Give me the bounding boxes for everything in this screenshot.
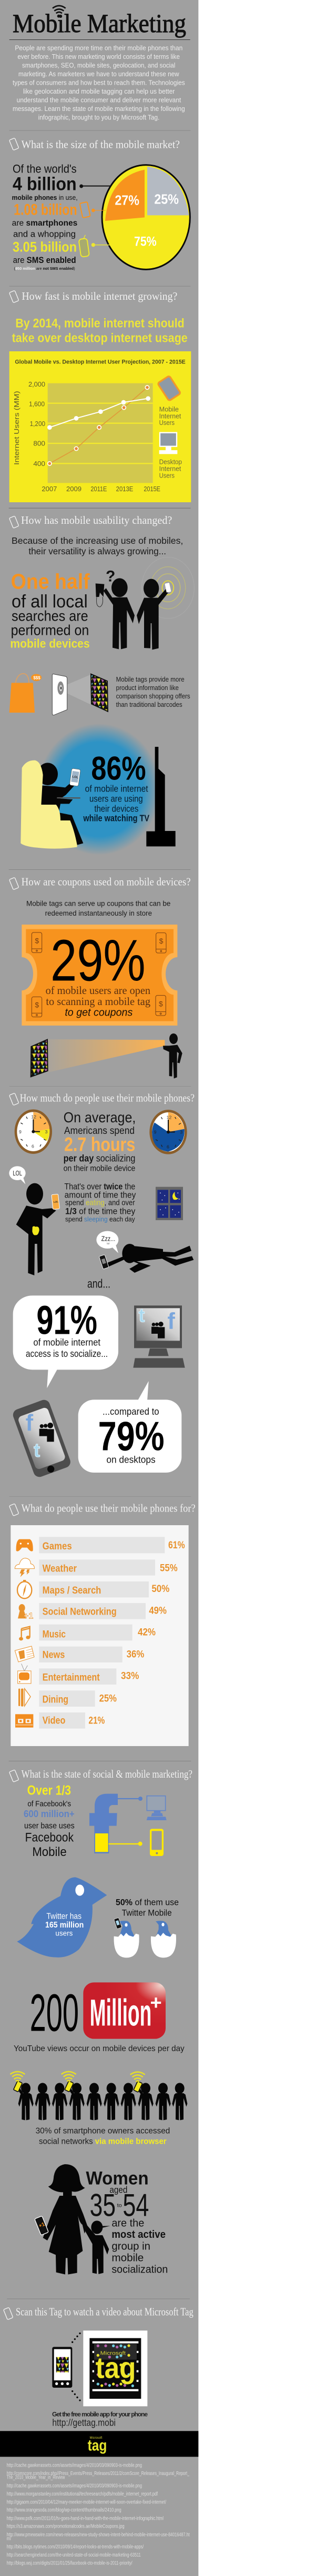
- source references: https://s3.amazonaws.com/promotionalcodes.ae/MobileCoupons.jpg: [7, 2524, 125, 2530]
- stat: 2.7 hours: 2.7 hours: [64, 1133, 135, 1155]
- panel: coupon ticket: to get coupons: [65, 1007, 133, 1019]
- stat text: phones in use: mobile phones in use,: [12, 194, 78, 201]
- source references: http://cache.gawkerassets.com/assets/images/4/2010/03/090903-is-mobile.png: [7, 2463, 142, 2469]
- icon: phone showing tag: [52, 2332, 81, 2401]
- stat: 200 million YouTube badge: +: [150, 1992, 162, 2014]
- stat: 86% while watching TV: 86%: [91, 751, 146, 787]
- row: entertainment: 33%: [121, 1671, 139, 1682]
- stat: 200 million YouTube badge: 200: [30, 1984, 79, 2043]
- intro text: [12, 535, 183, 556]
- row: video: Video: [43, 1715, 65, 1726]
- source references: http://comscore.com/index.php//Press_Events/Press_Releases/2011/2/comScore_Releases_Inaugural_Report_: [7, 2471, 189, 2477]
- footer band with Microsoft Tag logo: tag: [88, 2437, 107, 2454]
- panel: coupon ticket: to scanning a mobile tag: [46, 996, 150, 1008]
- icon: smartphone with social logos: t: [34, 1439, 40, 1461]
- row: music: Music: [43, 1629, 66, 1640]
- axis labels: 1,600: [29, 400, 45, 408]
- panel: phone uses bar chart: [11, 1525, 189, 1746]
- heading: How fast is mobile internet growing?: [22, 291, 177, 302]
- section: size of the mobile market: [9, 138, 190, 271]
- stat: 2.7 hours: per day socializing: [64, 1152, 135, 1163]
- stat: half use Twitter Mobile: [116, 1897, 179, 1918]
- stat: 86% while watching TV: their devices: [94, 803, 139, 814]
- text block: Mobile tags provide more: [116, 676, 185, 683]
- stat: women aged 35 to 54: most active: [111, 2228, 166, 2240]
- axis labels: 2,000: [28, 381, 45, 388]
- stat: Facebook mobile: of Facebook's: [27, 1800, 71, 1808]
- source references: http://www.morganstanley.com/institutional/techresearch/pdfs/mobile_internet_report.pdf: [7, 2491, 158, 2497]
- stat: 29%: 29%: [50, 927, 146, 993]
- section: phone usage time: [9, 1092, 195, 1388]
- intro paragraph: like geolocation and mobile tagging can help us better: [23, 88, 175, 95]
- row: music: [19, 1625, 156, 1640]
- caption: YouTube views occur on mobile devices per day: [14, 2044, 185, 2053]
- stat text: phones in use: Of the world's: [13, 162, 77, 175]
- row: dining: [18, 1689, 117, 1707]
- illustration: sleeping person with Zzz bubble: [96, 1231, 193, 1273]
- intro paragraph: understand the mobile consumer and deliver more relevant: [17, 97, 181, 104]
- stat: women aged 35 to 54: are the: [111, 2217, 144, 2229]
- row: maps: Maps / Search: [43, 1585, 101, 1596]
- stat text: phones in use: 4 billion: [13, 174, 77, 195]
- stat: 86% while watching TV: of mobile internet: [85, 784, 148, 794]
- icon: smartphone with connector: [80, 202, 106, 218]
- stat text: phones in use: are smartphones: [12, 219, 77, 228]
- source references: http://blogs.wsj.com/digits/2011/01/25/facebook-cto-mobile-is-2011-priority/: [7, 2561, 133, 2567]
- stat: one half of local searches: mobile devices: [10, 637, 90, 651]
- row: games: [16, 1537, 185, 1553]
- icon: phone: [9, 138, 19, 150]
- intro paragraph: smartphones, SEO, mobile sites, geolocation, and social: [22, 62, 175, 69]
- row: weather: Weather: [43, 1563, 77, 1574]
- intro paragraph: ever before. This new marketing world consists of terms like: [17, 53, 180, 60]
- text block: than traditional barcodes: [116, 701, 182, 708]
- illustration: person on couch watching TV: [21, 724, 176, 855]
- stat: 200 million YouTube badge: Million: [90, 1992, 151, 2034]
- figures: two people with devices: [96, 567, 171, 650]
- speech bubble: 91%: 91%: [36, 1298, 97, 1343]
- icon: shopping bag: [9, 674, 42, 713]
- pie chart: [102, 165, 190, 269]
- icon: phone: [9, 1093, 19, 1106]
- stat: 86% while watching TV: users are using: [89, 793, 143, 804]
- axis labels: 2007: [42, 485, 57, 493]
- row: entertainment: [18, 1664, 139, 1685]
- illustration: sleeping person with Zzz bubble: lol: [107, 1242, 109, 1245]
- legend: desktop: Users: [159, 472, 175, 479]
- header: [9, 6, 190, 131]
- speech bubble: 79%: on desktops: [106, 1454, 156, 1465]
- stat: one half of local searches: searches are: [12, 608, 88, 624]
- icon: wifi signal: [53, 6, 66, 17]
- section: footer: [0, 2410, 198, 2567]
- stat: 200 million YouTube badge: [30, 1982, 166, 2043]
- pie chart: 27%: [115, 192, 139, 208]
- text block: product information like: [116, 684, 179, 692]
- desktop series: [47, 396, 150, 430]
- comparison text: eating and sleeping: amount of time they: [65, 1190, 136, 1200]
- stat: Facebook mobile: 600 million+: [24, 1809, 75, 1819]
- comparison text: eating and sleeping: spend sleeping each day: [65, 1215, 135, 1223]
- intro text: Mobile tags can serve up coupons that can be: [26, 899, 171, 907]
- row: games: Games: [43, 1541, 72, 1552]
- row: music: 42%: [138, 1627, 156, 1638]
- stat: women aged 35 to 54: Women: [86, 2168, 149, 2188]
- panel: line chart: [9, 351, 191, 502]
- axis labels: 2011E: [90, 485, 107, 493]
- panel: line chart: Global Mobile vs. Desktop Internet User Projection, 2007 - 2015E: [15, 359, 186, 365]
- heading: What is the size of the mobile market?: [22, 139, 180, 151]
- stat: half use Twitter Mobile: Twitter Mobile: [122, 1908, 172, 1918]
- speech bubble: 91%: [13, 1295, 118, 1388]
- row: news: 36%: [127, 1649, 144, 1660]
- stat: women aged 35 to 54: aged: [109, 2184, 127, 2195]
- source references: http://bits.blogs.nytimes.com/2010/09/14/report-looks-at-trends-with-mobile-apps/: [7, 2544, 144, 2550]
- Microsoft Tag code: tag: [96, 2352, 136, 2385]
- app download text: [52, 2410, 148, 2428]
- app download text: http://gettag.mobi: [52, 2418, 116, 2428]
- icon: clock right: 9: [154, 1130, 157, 1135]
- stat: women aged 35 to 54: 54: [123, 2187, 149, 2223]
- Microsoft Tag code: Microsoft: [100, 2350, 126, 2356]
- icon: phone: [9, 877, 19, 890]
- intro paragraph: People are spending more time on their mobile phones than: [15, 44, 182, 52]
- icon: clock right: 3: [180, 1130, 182, 1135]
- connector: total to pie: [79, 185, 111, 188]
- icon: desktop computer with social logos: [133, 1304, 185, 1368]
- intro paragraph: [13, 44, 185, 121]
- footer band with Microsoft Tag logo: Microsoft: [90, 2437, 103, 2440]
- heading: How are coupons used on mobile devices?: [22, 876, 191, 888]
- legend: desktop: Desktop: [159, 459, 182, 466]
- row: video: 21%: [88, 1715, 105, 1726]
- axis labels: 800: [33, 440, 45, 447]
- stat: women aged 35 to 54: mobile: [111, 2252, 144, 2264]
- comparison text: eating and sleeping: 1/3 of the time they: [65, 1206, 136, 1216]
- stat: 2.7 hours: on their mobile device: [64, 1164, 135, 1173]
- speech bubble: 79%: 79%: [98, 1413, 165, 1459]
- heading: Scan this Tag to watch a video about Microsoft Tag: [16, 2306, 193, 2318]
- source references: [7, 2463, 190, 2567]
- legend: mobile: Mobile: [159, 405, 179, 413]
- axis labels: Internet Users (MM): [13, 391, 21, 465]
- stat: 86% while watching TV: [83, 751, 149, 823]
- figures: two people with devices: ?: [106, 567, 115, 585]
- row: weather: 55%: [160, 1563, 178, 1574]
- stat: half use Twitter Mobile: 50% of them use: [116, 1897, 179, 1907]
- row: social networking: +1: [24, 1611, 33, 1620]
- mobile series: [48, 386, 149, 465]
- small phone icons: [32, 932, 166, 1017]
- section: coupons: [9, 876, 191, 1087]
- stat: Facebook mobile: user base uses: [24, 1822, 75, 1831]
- icon: flip phone with connector: [79, 235, 110, 257]
- illustration: Twitter bird: users: [55, 1929, 73, 1938]
- legend: desktop: Internet: [159, 465, 181, 473]
- footer band with Microsoft Tag logo: [0, 2431, 198, 2457]
- speech bubble: 79%: [78, 1381, 181, 1473]
- illustration: woman and child: [35, 2164, 110, 2275]
- stat text: phones in use: 1.08 billion: [14, 201, 77, 218]
- caption with highlight: [36, 2127, 170, 2146]
- stat: 2.7 hours: [64, 1109, 136, 1173]
- stat: one half of local searches: [10, 569, 90, 651]
- stat: women aged 35 to 54: 35: [90, 2187, 116, 2223]
- stat text: phones in use: (950 million are not SMS enabled): [14, 266, 75, 271]
- stat: women aged 35 to 54: [86, 2168, 168, 2276]
- comparison text: eating and sleeping: [64, 1182, 136, 1223]
- icon: phone: [9, 1770, 19, 1782]
- panel: coupon ticket: $: [35, 1000, 39, 1009]
- icon: clock right: [149, 1110, 187, 1154]
- icon: clock right: 6: [167, 1144, 169, 1149]
- intro paragraph: types of consumers and how best to reach them. Technologies: [13, 79, 185, 86]
- icon: phone scanning tag: [52, 674, 108, 715]
- grey page background panel: [0, 0, 198, 2576]
- heading: What is the state of social & mobile marketing?: [22, 1769, 192, 1780]
- legend: desktop: [159, 433, 182, 479]
- row: news: [15, 1646, 144, 1662]
- stat: women aged 35 to 54: socialization: [111, 2264, 168, 2276]
- icon: clock left: 9: [19, 1129, 22, 1134]
- row: weather: [15, 1558, 178, 1577]
- icon: clock left: 12: [31, 1114, 36, 1120]
- pictogram: ten people, three with phones: [10, 2072, 187, 2120]
- icon: smartphone with social logos: [12, 1398, 72, 1478]
- stat: women aged 35 to 54: group in: [111, 2240, 150, 2253]
- section: mobile internet growth: [9, 290, 191, 502]
- icon: clock left: [15, 1109, 52, 1154]
- icon: desktop computer with social logos: t: [138, 1304, 145, 1326]
- axis labels: 2015E: [144, 485, 160, 493]
- section: social and mobile marketing: [9, 1769, 192, 1958]
- source references: http://www.orangesoda.com/blog/wp-content/thumbnails/2410.png: [7, 2508, 121, 2513]
- stat: one half of local searches: performed on: [11, 622, 89, 638]
- source references: http://www.psfk.com/2011/01/tv-goes-hand-in-hand-with-the-mobile-internet-infographic.html: [7, 2516, 164, 2521]
- icon: clock left: 6: [32, 1144, 34, 1149]
- axis labels: 400: [33, 460, 45, 468]
- yellow headline: By 2014, mobile internet should: [15, 317, 185, 331]
- title: Mobile Marketing: [13, 8, 186, 38]
- panel: coupon ticket: $: [35, 936, 39, 945]
- illustration: standing person with LOL bubble: LOL: [13, 1169, 22, 1177]
- Microsoft Tag code: [83, 2330, 147, 2406]
- icon: phone: [9, 516, 19, 528]
- row: social networking: [18, 1603, 167, 1620]
- comparison text: eating and sleeping: That's over twice the: [64, 1182, 135, 1192]
- icon: phone: [4, 2307, 13, 2320]
- icon: smartphone with social logos: f: [26, 1411, 34, 1436]
- source references: http://cache.gawkerassets.com/assets/images/4/2010/03/090903-is-mobile.png: [7, 2483, 142, 2489]
- intro paragraph: messages. Learn the state of mobile marketing in the following: [13, 105, 185, 113]
- stat: 2.7 hours: Americans spend: [64, 1125, 135, 1137]
- yellow headline: [12, 317, 188, 346]
- section: mobile usability: [9, 515, 194, 651]
- icon: phone: [9, 1504, 19, 1516]
- source references: http://www.prnewswire.com/news-releases/new-study-shows-intent-behind-mobile-internet-use-84016487.ht: [7, 2532, 190, 2538]
- intro text: [26, 899, 171, 917]
- section: desktop comparison: [9, 1381, 196, 1516]
- pie chart: 75%: [134, 235, 157, 249]
- illustration: sleeping person with Zzz bubble: Zzz...: [101, 1234, 115, 1242]
- text block: comparison shopping offers: [116, 693, 190, 700]
- icon: clock right: 12: [167, 1114, 171, 1120]
- speech bubble: 91%: access is to socialize...: [26, 1348, 108, 1359]
- illustration: standing person with LOL bubble: [9, 1166, 59, 1275]
- stat: one half of local searches: One half: [11, 569, 90, 593]
- stat: 2.7 hours: On average,: [64, 1109, 136, 1125]
- legend: mobile: Users: [159, 419, 175, 427]
- row: social networking: 49%: [149, 1606, 167, 1617]
- icon: night window: [156, 1187, 183, 1220]
- panel: coupon ticket: [22, 925, 177, 1026]
- heading: What do people use their mobile phones for?: [22, 1503, 196, 1514]
- pie chart: 25%: [154, 191, 179, 207]
- icon: clock left: 3: [45, 1129, 48, 1134]
- section: scan this tag: [4, 2299, 193, 2406]
- legend: mobile: [158, 376, 181, 427]
- axis labels: 2009: [66, 485, 82, 493]
- icon: phone: [9, 290, 19, 303]
- intro paragraph: infographic, brought to you by Microsoft Tag.: [38, 114, 159, 121]
- stat: women aged 35 to 54: to: [117, 2203, 122, 2209]
- stat text: phones in use: and a whopping: [13, 229, 76, 239]
- row: maps: 50%: [151, 1584, 169, 1595]
- intro paragraph: marketing. As marketers we have to understand these new: [18, 70, 179, 78]
- panel: coupon ticket: $: [159, 937, 164, 945]
- intro text: redeemed instantaneously in store: [45, 909, 152, 917]
- icon: desktop computer with social logos: f: [167, 1309, 175, 1334]
- source references: ml: [7, 2536, 11, 2542]
- illustration: standing person with LOL bubble: LOL: [54, 1200, 58, 1203]
- illustration: Twitter bird: [17, 1877, 107, 1958]
- stat: Facebook mobile: [24, 1783, 75, 1859]
- row: entertainment: Entertainment: [43, 1672, 100, 1683]
- stat: Facebook mobile: Over 1/3: [27, 1783, 71, 1798]
- row: games: 61%: [168, 1540, 185, 1551]
- row: dining: 25%: [99, 1693, 117, 1705]
- stat text: phones in use: are SMS enabled: [13, 255, 76, 265]
- section: YouTube and social browsing: [10, 1982, 187, 2276]
- stat: one half of local searches: of all local: [12, 592, 88, 612]
- caption with highlight: social networks via mobile browser: [39, 2137, 167, 2146]
- stat: Facebook mobile: Facebook: [25, 1831, 74, 1845]
- intro text: their versatility is always growing...: [28, 546, 166, 556]
- section: mobile tags vs barcodes: [9, 674, 190, 870]
- text block: [116, 676, 190, 708]
- source references: http://searchengineland.com/the-united-state-of-social-mobile-marketing-63511: [7, 2552, 141, 2558]
- stat text: phones in use: [12, 162, 78, 271]
- axis labels: [13, 381, 160, 493]
- row: maps: [17, 1580, 169, 1598]
- icon: shopping bag: $$$: [33, 675, 40, 680]
- row: video: [15, 1712, 105, 1729]
- illustration: Twitter bird: 165 million: [45, 1921, 84, 1930]
- text: and: and...: [87, 1276, 110, 1290]
- caption with highlight: 30% of smartphone owners accessed: [36, 2127, 170, 2136]
- illustration: person scanning tag: [31, 1033, 182, 1079]
- intro text: Because of the increasing use of mobiles,: [12, 535, 183, 546]
- row: dining: Dining: [43, 1695, 68, 1706]
- source references: The_2010_Mobile_Year_in_Review: [7, 2475, 65, 2481]
- row: news: News: [43, 1649, 65, 1660]
- signal rings: [141, 557, 194, 618]
- row: social networking: Social Networking: [43, 1607, 117, 1618]
- stat text: phones in use: 3.05 billion: [13, 239, 77, 255]
- illustration: hatching chicks: [114, 1918, 176, 1958]
- yellow headline: take over desktop internet usage: [12, 331, 188, 346]
- heading: How has mobile usability changed?: [21, 515, 172, 526]
- illustration: woman and child: +1: [38, 2222, 46, 2229]
- axis labels: 1,200: [30, 420, 45, 428]
- stat: 86% while watching TV: while watching TV: [83, 813, 149, 823]
- panel: coupon ticket: of mobile users are open: [46, 985, 151, 997]
- illustration: Twitter bird: Twitter has: [46, 1912, 82, 1921]
- illustration: person on couch watching TV: LOL: [72, 775, 79, 779]
- comparison text: eating and sleeping: spend eating, and over: [65, 1199, 135, 1208]
- app download text: Get the free mobile app for your phone: [52, 2410, 148, 2418]
- axis labels: 2013E: [116, 485, 133, 493]
- source references: http://gigaom.com/2010/04/12/mary-meeker-mobile-internet-will-soon-overtake-fixed-internet/: [7, 2499, 166, 2505]
- heading: How much do people use their mobile phones?: [20, 1092, 195, 1104]
- speech bubble: 91%: of mobile internet: [33, 1337, 100, 1347]
- legend: mobile: Internet: [159, 412, 181, 420]
- panel: coupon ticket: $: [159, 999, 163, 1008]
- speech bubble: 79%: ...compared to: [103, 1406, 159, 1417]
- stat: Facebook mobile: Mobile: [32, 1845, 67, 1859]
- icon: Facebook f split between devices: [89, 1794, 167, 1856]
